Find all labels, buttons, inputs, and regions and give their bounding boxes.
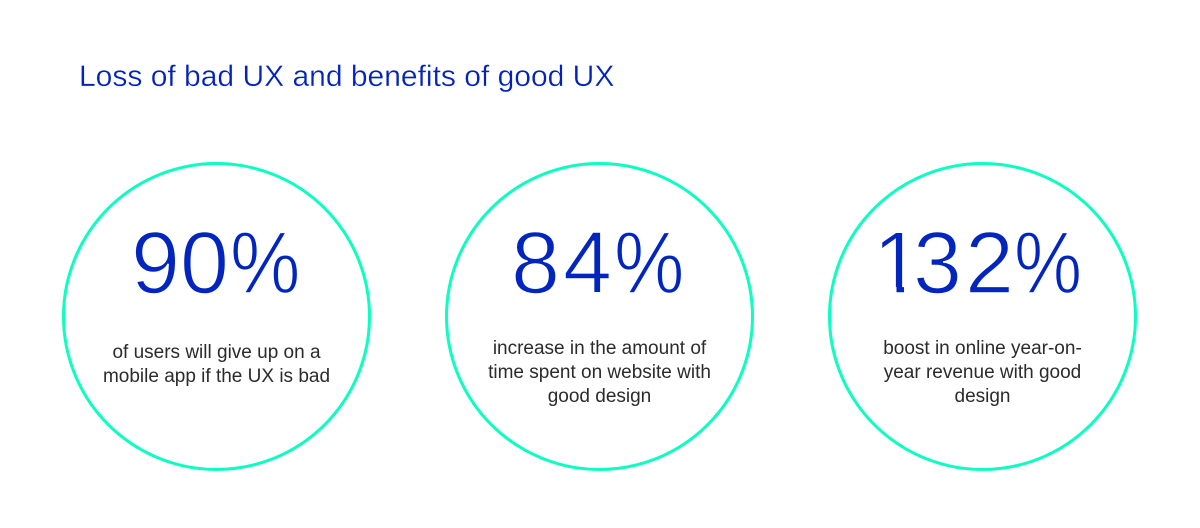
number 90%: % xyxy=(230,213,300,312)
number 84%: 8 xyxy=(511,213,560,312)
number 132%: % xyxy=(1014,213,1082,312)
description 3: boost in online year-on- xyxy=(883,338,1082,359)
description 1: of users will give up on a xyxy=(112,342,321,363)
description 2: time spent on website with xyxy=(488,362,711,383)
number 132%: 3 xyxy=(913,213,962,312)
circle outline 2 xyxy=(445,162,754,471)
description 3 xyxy=(883,338,1082,407)
number 84%: 4 xyxy=(563,213,612,312)
number 132%: 2 xyxy=(965,213,1014,312)
number 90%: 9 xyxy=(131,213,180,312)
number 84%: % xyxy=(614,213,684,312)
panel: 90% stat xyxy=(62,162,371,471)
description 1 xyxy=(103,342,330,387)
number 84% xyxy=(511,213,684,312)
circle outline 3 xyxy=(828,162,1137,471)
description 1: mobile app if the UX is bad xyxy=(103,366,330,387)
description 3: design xyxy=(954,386,1010,407)
description 2: increase in the amount of xyxy=(493,338,706,359)
description 3: year revenue with good xyxy=(884,362,1081,383)
number 90% xyxy=(131,213,300,312)
number 90%: 0 xyxy=(180,213,229,312)
number 132% xyxy=(882,213,1082,312)
description 2: good design xyxy=(548,386,651,407)
description 2 xyxy=(488,338,711,407)
panel: 84% stat xyxy=(445,162,754,471)
number 132%: 1 xyxy=(873,213,922,312)
title: Loss of bad UX and benefits of good UX xyxy=(79,60,614,93)
circle outline 1 xyxy=(62,162,371,471)
panel: 132% stat xyxy=(828,162,1137,471)
